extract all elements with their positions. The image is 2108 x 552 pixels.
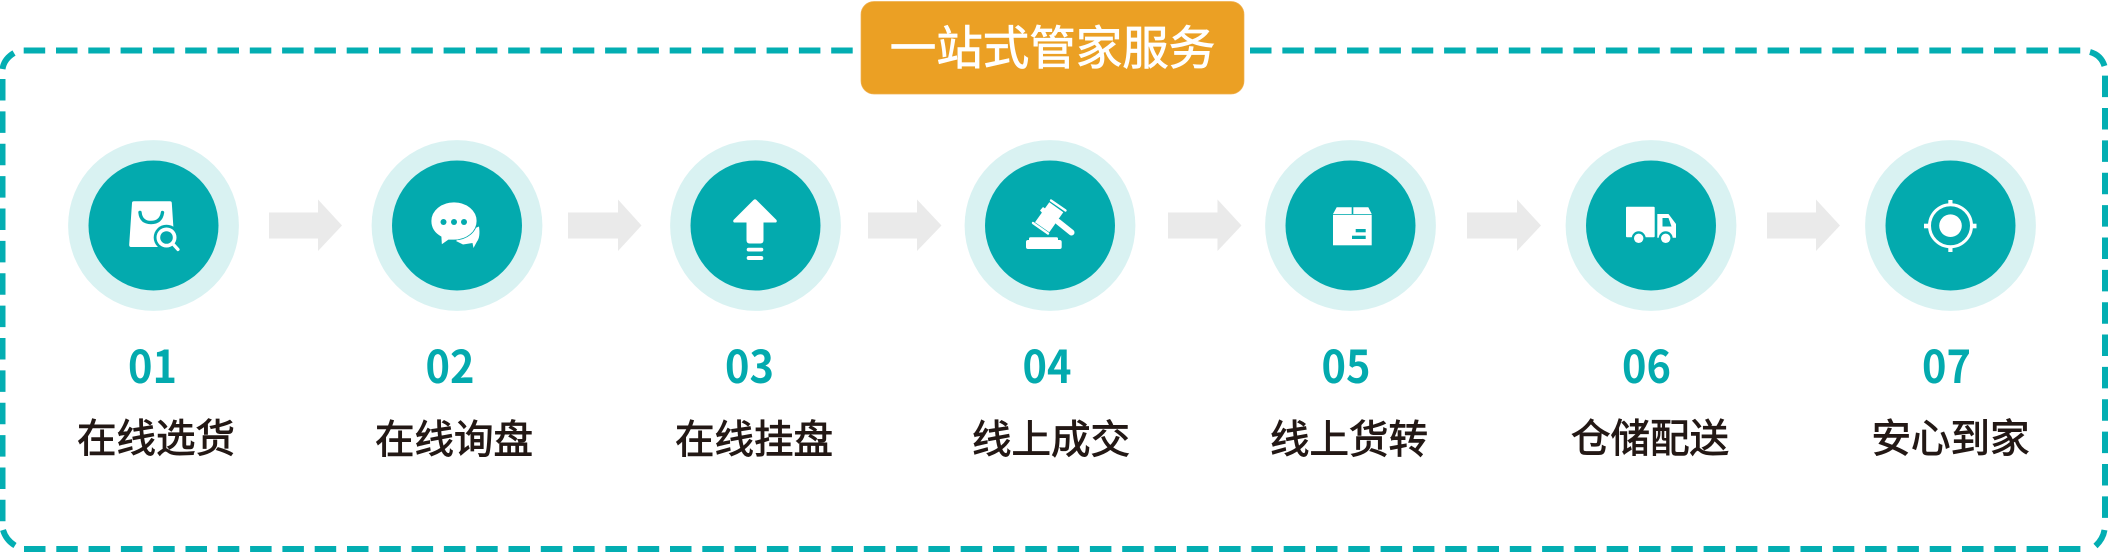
step 01: online selection bbox=[68, 140, 239, 464]
number 04: 04 bbox=[1022, 331, 1072, 396]
icon: chat bubbles bbox=[431, 202, 479, 248]
icon: shopping bag with magnifier bbox=[129, 201, 179, 250]
label: 安心到家 bbox=[1872, 408, 2030, 464]
number 05: 05 bbox=[1322, 331, 1370, 396]
number 06: 06 bbox=[1622, 331, 1671, 396]
step 02: online inquiry bbox=[372, 140, 542, 466]
arrow 3 to 4 bbox=[868, 200, 942, 251]
step 03: online listing bbox=[670, 140, 841, 466]
label: 仓储配送 bbox=[1571, 408, 1729, 464]
number 07: 07 bbox=[1922, 331, 1971, 396]
step 07: safe home delivery bbox=[1865, 140, 2036, 464]
icon: upload arrow bbox=[733, 199, 777, 260]
arrow 2 to 3 bbox=[568, 200, 642, 251]
label: 线上货转 bbox=[1270, 408, 1428, 466]
title badge: 一站式管家服务 bbox=[890, 12, 1215, 78]
arrow 6 to 7 bbox=[1767, 200, 1840, 251]
title badge bbox=[861, 2, 1244, 94]
icon: auction gavel bbox=[1026, 200, 1072, 249]
arrow 5 to 6 bbox=[1467, 200, 1541, 251]
icon: parcel box bbox=[1333, 207, 1372, 245]
step 06: warehousing and delivery bbox=[1566, 140, 1736, 464]
step 04: online transaction bbox=[965, 140, 1135, 466]
label: 线上成交 bbox=[972, 408, 1130, 466]
label: 在线询盘 bbox=[375, 408, 533, 466]
step 05: online cargo transfer bbox=[1265, 140, 1436, 466]
icon: delivery truck bbox=[1626, 207, 1676, 245]
label: 在线挂盘 bbox=[675, 408, 833, 466]
number 03: 03 bbox=[725, 331, 774, 396]
number 01: 01 bbox=[128, 331, 177, 396]
number 02: 02 bbox=[426, 331, 474, 396]
label: 在线选货 bbox=[77, 408, 235, 464]
icon: target location bbox=[1924, 200, 1976, 252]
arrow 1 to 2 bbox=[269, 200, 342, 251]
arrow 4 to 5 bbox=[1168, 200, 1242, 251]
